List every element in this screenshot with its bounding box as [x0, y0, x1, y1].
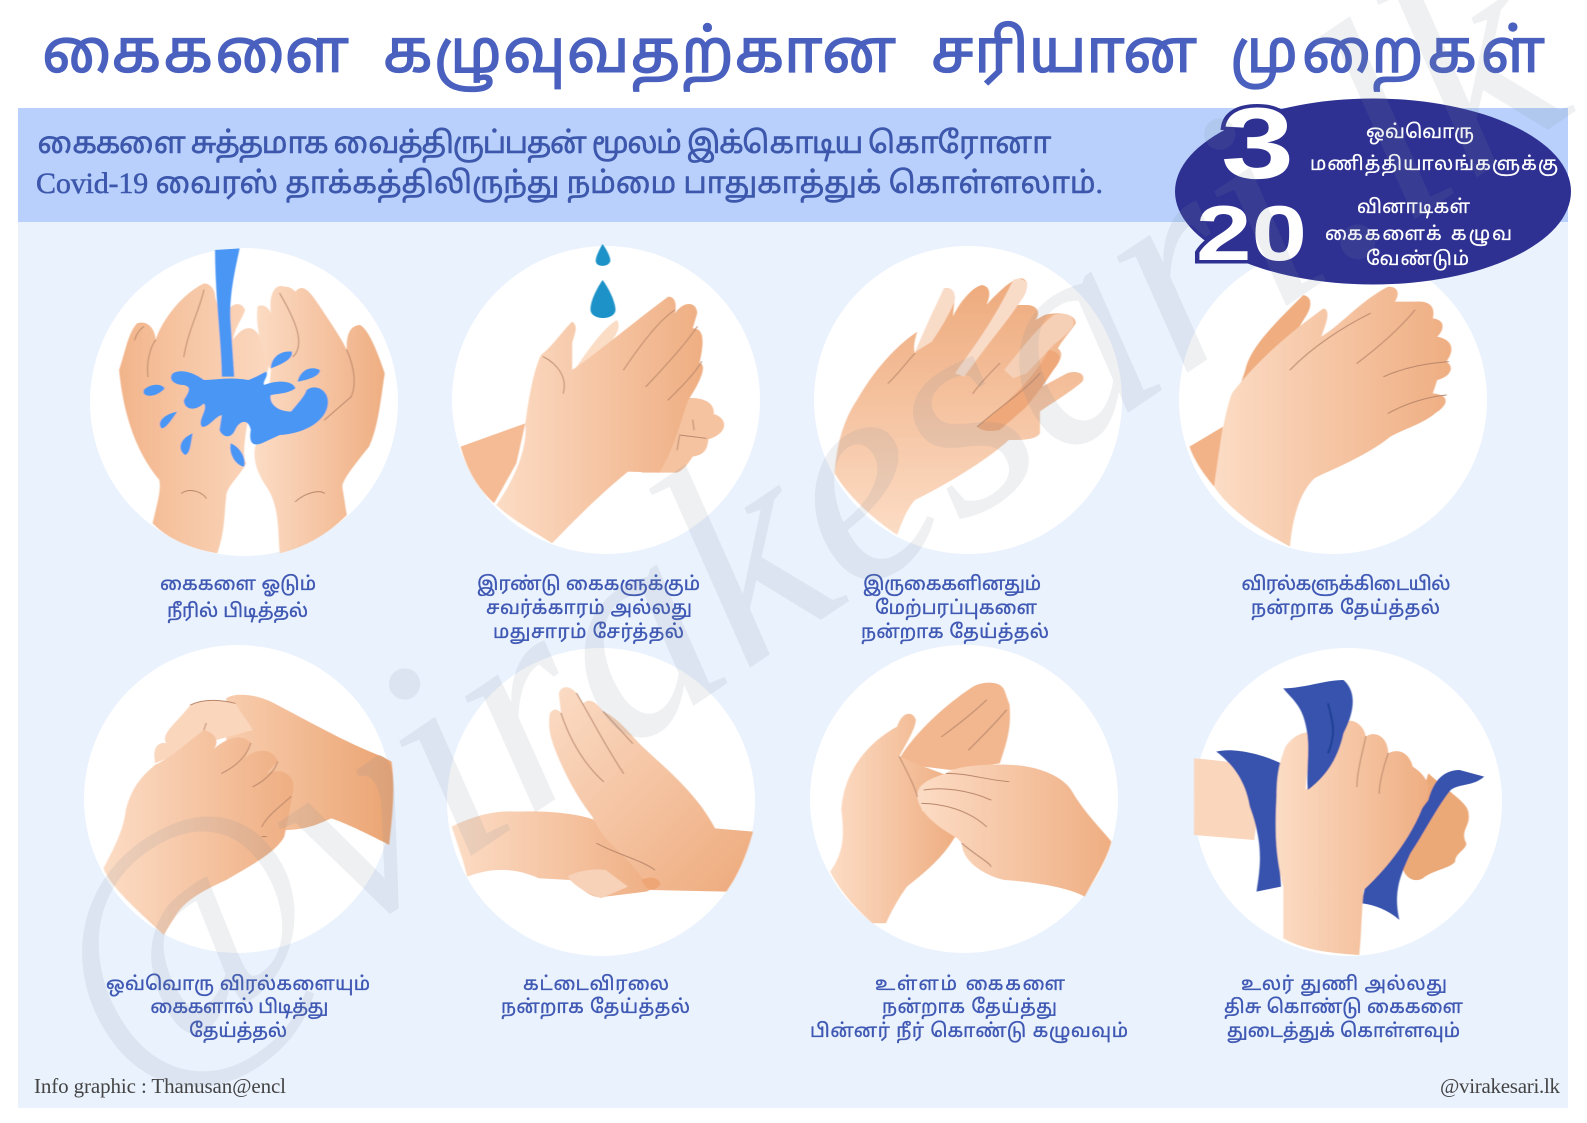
caption 8	[1224, 973, 1463, 1044]
caption 7: நன்றாக தேய்த்து	[882, 996, 1057, 1020]
step 7: rubbing palms then rinse	[830, 683, 1111, 923]
intro text: Covid-19 வைரஸ் தாக்கத்திலிருந்து நம்மை பாதுகாத்துக் கொள்ளலாம்.	[36, 167, 1103, 203]
caption 2: மதுசாரம் சேர்த்தல்	[493, 621, 684, 645]
step 2: soap on both hands	[461, 244, 724, 543]
captions row 1	[160, 573, 1451, 645]
panel: intro band	[18, 108, 1568, 222]
caption 5: கைகளால் பிடித்து	[150, 996, 328, 1020]
title: கழுவுவதற்கான	[383, 19, 896, 91]
caption 7: உள்ளம் கைகளை	[875, 974, 1065, 995]
number 3: 3	[1221, 87, 1294, 200]
step 4: rubbing between fingers	[1190, 287, 1451, 547]
caption 5: தேய்த்தல்	[189, 1020, 287, 1043]
caption 2	[477, 573, 700, 645]
caption 1: கைகளை ஓடும்	[160, 573, 316, 597]
caption 4: விரல்களுக்கிடையில்	[1242, 573, 1451, 597]
intro text	[36, 127, 1103, 203]
title: கைகளை	[42, 19, 349, 85]
caption 1: நீரில் பிடித்தல்	[167, 600, 308, 623]
caption 6: நன்றாக தேய்த்தல்	[501, 996, 690, 1019]
icon: water drops	[590, 244, 616, 318]
caption 6: கட்டைவிரலை	[523, 973, 669, 995]
caption 5	[106, 973, 370, 1043]
caption 3: நன்றாக தேய்த்தல்	[861, 621, 1049, 644]
captions row 2	[106, 973, 1463, 1044]
caption 3: மேற்பரப்புகளை	[875, 597, 1037, 620]
caption 2: இரண்டு கைகளுக்கும்	[477, 573, 700, 597]
step 5: gripping fingers	[103, 695, 393, 935]
intro text: கைகளை சுத்தமாக வைத்திருப்பதன் மூலம் இக்கொடிய கொரோனா	[37, 127, 1051, 163]
caption 3	[861, 573, 1049, 644]
caption 7	[810, 974, 1128, 1044]
title: சரியான	[931, 19, 1197, 85]
caption 3: இருகைகளினதும்	[863, 573, 1041, 597]
caption 6	[501, 973, 690, 1019]
caption 4: நன்றாக தேய்த்தல்	[1251, 597, 1440, 620]
caption 8: உலர் துணி அல்லது	[1241, 973, 1447, 997]
footer credit right: @virakesari.lk	[1440, 1074, 1560, 1098]
step circles	[84, 246, 1502, 956]
caption 5: ஒவ்வொரு விரல்களையும்	[106, 973, 370, 997]
step 6: rubbing thumbs	[452, 687, 753, 898]
badge text: மணித்தியாலங்களுக்கு	[1310, 153, 1558, 177]
badge text	[1310, 121, 1558, 271]
caption 7: பின்னர் நீர் கொண்டு கழுவவும்	[810, 1020, 1128, 1044]
badge: 3 hours 20 seconds	[1175, 87, 1571, 284]
title: முறைகள்	[1230, 19, 1545, 91]
footer credit left: Info graphic : Thanusan@encl	[34, 1074, 286, 1098]
badge text: கைகளைக் கழுவ	[1325, 224, 1512, 247]
badge text: வினாடிகள்	[1357, 196, 1470, 219]
caption 2: சவர்க்காரம் அல்லது	[486, 598, 692, 621]
panel: light blue background	[18, 222, 1568, 1108]
caption 8: துடைத்துக் கொள்ளவும்	[1227, 1020, 1460, 1044]
title	[42, 19, 1545, 91]
caption 8: திசு கொண்டு கைகளை	[1224, 996, 1463, 1019]
step 1: hands under running water	[119, 248, 385, 553]
caption 4	[1242, 573, 1451, 620]
step 8: drying hands with towel	[1194, 680, 1484, 955]
step 3: rubbing backs of hands	[835, 278, 1083, 535]
badge text: ஒவ்வொரு	[1366, 121, 1474, 145]
badge text: வேண்டும்	[1366, 248, 1469, 271]
caption 1	[160, 573, 316, 623]
number 20: 20	[1196, 189, 1307, 277]
icon: blue towel	[1216, 750, 1484, 920]
